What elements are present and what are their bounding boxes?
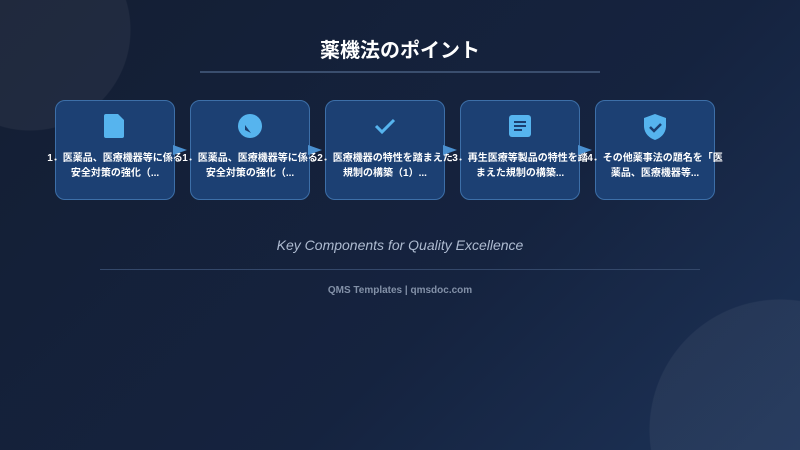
card 3	[325, 100, 445, 200]
card 5	[595, 100, 715, 200]
card 3: 2．医療機器の特性を踏まえた	[317, 153, 453, 164]
icon: check	[375, 119, 395, 134]
arrow 4	[578, 145, 592, 155]
subtitle: Key Components for Quality Excellence	[277, 237, 523, 253]
card 4	[460, 100, 580, 200]
card 5: 薬品、医療機器等...	[611, 168, 699, 179]
icon: shield	[644, 114, 666, 140]
card 3: 規制の構築（1）...	[343, 168, 427, 179]
card 4: 3．再生医療等製品の特性を踏	[452, 153, 588, 164]
arrow 2	[308, 145, 322, 155]
icon: document	[104, 114, 124, 138]
title: 薬機法のポイント	[320, 40, 480, 62]
card 2	[190, 100, 310, 200]
card 1	[55, 100, 175, 200]
card 1: 1．医薬品、医療機器等に係る	[47, 153, 183, 164]
arrow 3	[443, 145, 457, 155]
card 4: まえた規制の構築...	[476, 168, 564, 179]
icon: circle	[238, 114, 262, 138]
card 5: 4．その他薬事法の題名を「医	[587, 153, 723, 164]
card 2: 1．医薬品、医療機器等に係る	[182, 153, 318, 164]
icon: note	[509, 115, 531, 137]
arrow 1	[173, 145, 187, 155]
card 1: 安全対策の強化（...	[71, 168, 159, 179]
footer: QMS Templates | qmsdoc.com	[328, 285, 472, 296]
card 2: 安全対策の強化（...	[206, 168, 294, 179]
